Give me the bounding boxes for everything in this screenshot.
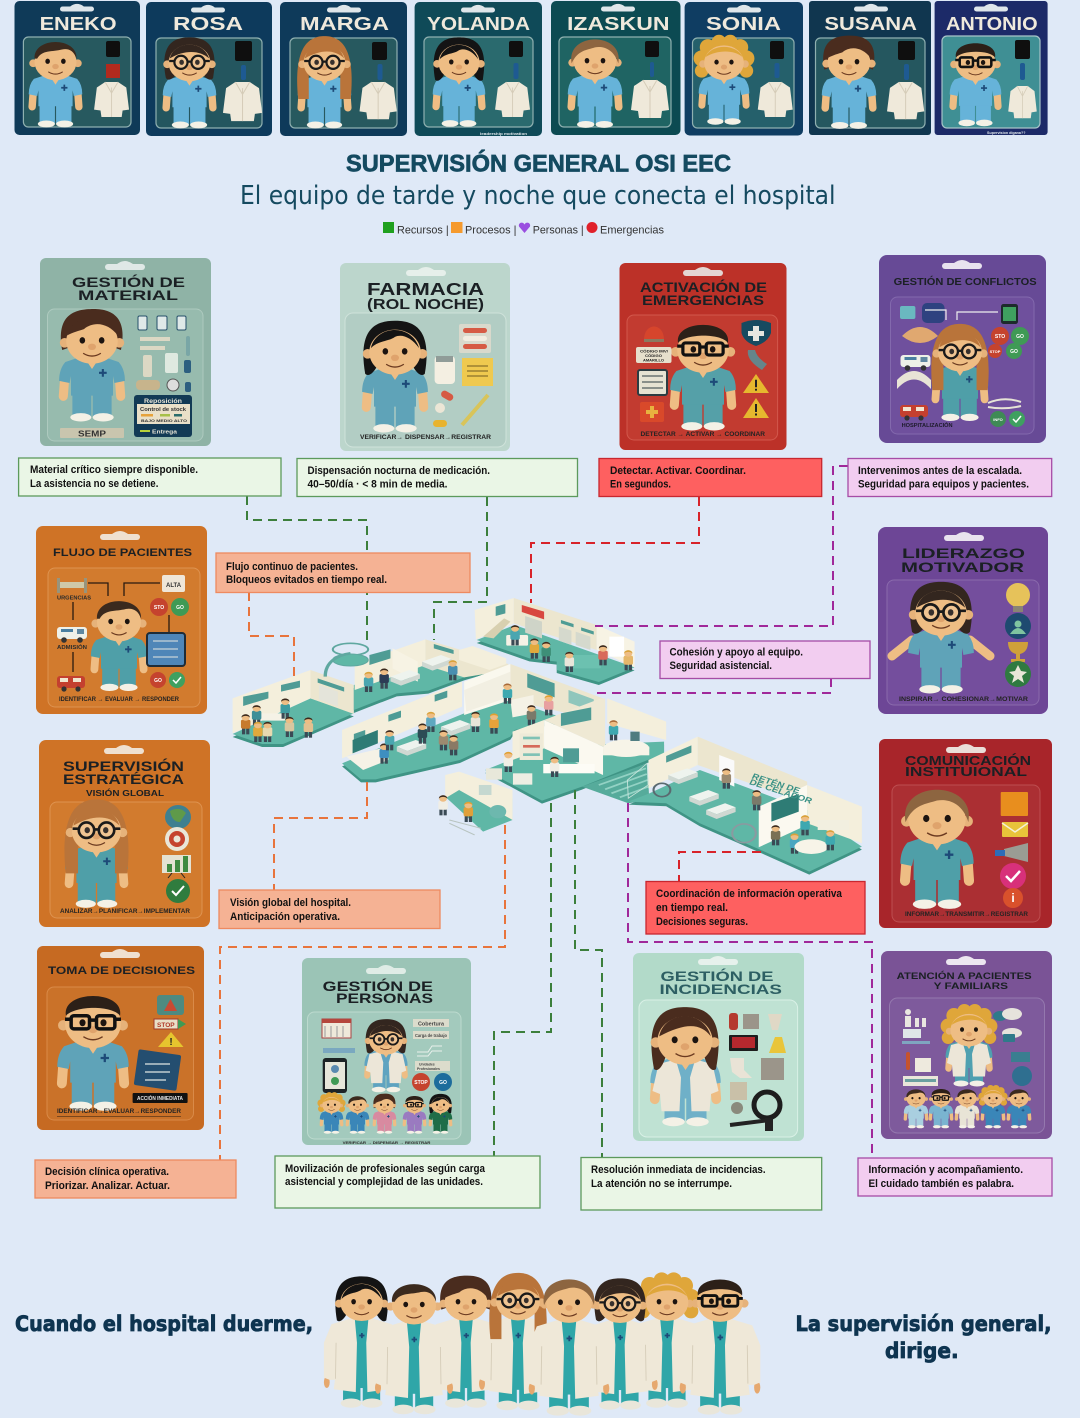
connectors: green (Recursos) xyxy=(247,496,602,1157)
heading xyxy=(72,273,185,303)
legend xyxy=(383,222,664,236)
closing text left: Cuando el hospital duerme, xyxy=(15,1312,313,1336)
care icons xyxy=(902,1008,1032,1086)
room: porter station: RETÉN DE xyxy=(750,772,802,795)
heading: (ROL NOCHE) xyxy=(367,296,484,313)
heading xyxy=(323,977,433,1006)
emergency icons: AMARILLO xyxy=(643,358,664,362)
decision icons: ! xyxy=(169,1037,173,1048)
reposición box xyxy=(134,395,192,437)
flow icons and arrows xyxy=(57,575,189,692)
heading: TOMA DE DECISIONES xyxy=(48,965,195,977)
card: Antonio xyxy=(935,1,1048,135)
heading: PERSONAS xyxy=(336,990,433,1006)
connectors: red (Emergencias) xyxy=(531,497,761,882)
stairs xyxy=(582,763,649,803)
decision icons xyxy=(134,995,186,1091)
card: Eneko: ENEKO xyxy=(40,14,117,34)
doll xyxy=(941,1004,997,1086)
staff icons: STOP xyxy=(414,1080,428,1086)
panel: gestión de conflictos xyxy=(879,255,1046,443)
staff icons: Profesionales xyxy=(417,1067,440,1071)
callout: material: Material crítico siempre disponible. xyxy=(30,464,198,476)
panel: flujo de pacientes xyxy=(36,526,207,714)
card: Susana: SUSANA xyxy=(824,14,917,34)
closing text right: dirige. xyxy=(885,1339,959,1363)
callout: cohesión xyxy=(660,641,870,678)
callout: información: Información y acompañamiento. xyxy=(868,1164,1023,1176)
incident icons xyxy=(729,1013,786,1131)
panel: farmacia xyxy=(340,263,510,451)
callout: información: El cuidado también es palabra. xyxy=(868,1178,1014,1190)
room: porter station xyxy=(628,737,862,875)
footer steps: VERIFICAR → DISPENSAR → REGISTRAR xyxy=(343,1140,431,1145)
callout: resolución: La atención no se interrumpe. xyxy=(591,1178,732,1190)
doll xyxy=(670,325,736,430)
callout: material xyxy=(19,458,281,496)
doll xyxy=(59,309,125,422)
card: Izaskun xyxy=(551,1,680,135)
callout: flujo xyxy=(216,553,470,592)
doll xyxy=(931,324,989,421)
callout: coordinación: Decisiones seguras. xyxy=(656,916,748,928)
legend: Emergencias xyxy=(600,224,664,236)
heading xyxy=(640,278,767,308)
supplies icons xyxy=(136,316,191,392)
heading xyxy=(63,757,184,798)
flow icons and arrows: STO xyxy=(154,605,164,611)
heading: ESTRATÉGICA xyxy=(63,771,184,787)
room: emergency entrance xyxy=(475,598,635,685)
room: ward with spiral stairs xyxy=(325,639,508,713)
heading: Y FAMILIARS xyxy=(934,981,1008,992)
callout: coordinación xyxy=(646,882,865,934)
footer steps: ANALIZAR→PLANIFICAR→IMPLEMENTAR xyxy=(60,909,191,915)
staff icons: Carga de trabajo xyxy=(415,1033,447,1038)
subtitle: El equipo de tarde y noche que conecta el hospital xyxy=(240,181,836,211)
room: lab and reception desk xyxy=(485,698,666,804)
callout: coordinación: Coordinación de información operativa xyxy=(656,888,843,900)
heading: ATENCIÓN A PACIENTES xyxy=(897,970,1032,982)
footer steps: INSPIRAR→ COHESIONAR→MOTIVAR xyxy=(899,697,1029,703)
flow icons and arrows: ADMISIÓN xyxy=(57,643,87,651)
heading: GESTIÓN DE CONFLICTOS xyxy=(894,275,1037,288)
callout: farmacia: Dispensación nocturna de medicación. xyxy=(308,465,490,477)
heading: FLUJO DE PACIENTES xyxy=(53,547,192,559)
team group illustration xyxy=(324,1272,760,1416)
top row: team cards xyxy=(14,1,1048,136)
label: HOSPITALIZACIÓN xyxy=(902,421,953,429)
conflict icons: INFO xyxy=(993,417,1003,422)
flow icons and arrows: GO xyxy=(154,678,162,684)
room: central nursing unit xyxy=(342,664,603,782)
conflict icons: GO xyxy=(1010,349,1018,355)
heading: ACTIVACIÓN DE xyxy=(640,278,767,295)
callout: visión: Anticipación operativa. xyxy=(230,911,340,923)
callout: resolución: Resolución inmediata de incidencias. xyxy=(591,1164,766,1176)
card: Rosa: ROSA xyxy=(173,14,243,34)
card: Marga: MARGA xyxy=(300,14,389,34)
conflict icons: GO xyxy=(1016,334,1024,340)
decision icons: STOP xyxy=(157,1022,175,1029)
card: Yolanda xyxy=(415,2,542,136)
callout: detectar: En segundos. xyxy=(610,478,671,490)
label SEMP xyxy=(60,428,124,438)
card: Sonia: SONIA xyxy=(706,14,781,34)
callout: detectar xyxy=(599,458,822,496)
callout: cohesión: Cohesión y apoyo al equipo. xyxy=(670,647,803,659)
callout: detectar: Detectar. Activar. Coordinar. xyxy=(610,465,746,477)
emergency icons: CÓDIGO xyxy=(645,353,662,358)
doll xyxy=(892,582,990,694)
heading: SUPERVISIÓN xyxy=(63,757,184,774)
pharmacy icons xyxy=(433,324,493,427)
title: SUPERVISIÓN GENERAL OSI EEC xyxy=(346,150,731,178)
card: Antonio: ANTONIO xyxy=(946,14,1038,34)
flow icons and arrows: ALTA xyxy=(166,583,182,589)
footer steps: IDENTIFICAR → EVALUAR → RESPONDER xyxy=(59,697,180,703)
closing text right xyxy=(796,1312,1052,1363)
panel: activación de emergencias xyxy=(620,263,786,450)
emergency icons: CÓDIGO IMV/ xyxy=(640,348,668,354)
doll xyxy=(650,1007,721,1126)
panel: atención a pacientes xyxy=(881,951,1052,1139)
footer steps: INFORMAR→TRANSMITIR→REGISTRAR xyxy=(905,912,1029,918)
heading: LIDERAZGO xyxy=(902,545,1025,561)
panel: liderazgo motivador xyxy=(878,527,1048,714)
footer steps: DETECTAR → ACTIVAR → COORDINAR xyxy=(640,432,766,438)
card: Yolanda: leadership motivation xyxy=(480,131,528,136)
panel: comunicación institucional xyxy=(879,739,1052,928)
footer steps: VERIFICAR→ DISPENSAR→REGISTRAR xyxy=(360,435,492,441)
panel: gestión de material xyxy=(40,258,211,446)
card: Marga xyxy=(280,2,407,136)
reposición box: BAJO MEDIO ALTO xyxy=(141,419,187,423)
callout: flujo: Bloqueos evitados en tiempo real. xyxy=(226,574,387,586)
callout: farmacia: 40–50/día · < 8 min de media. xyxy=(308,478,448,490)
card: Sonia xyxy=(685,2,803,136)
communication icons xyxy=(995,792,1028,908)
isometric hospital map xyxy=(233,598,862,875)
panel: toma de decisiones xyxy=(37,946,204,1130)
callout: flujo: Flujo continuo de pacientes. xyxy=(226,561,358,573)
conflict icons: STOP xyxy=(990,349,1001,354)
callout: escalada: Seguridad para equipos y pacientes. xyxy=(858,478,1029,490)
label SEMP: SEMP xyxy=(78,430,107,438)
panel: gestión de personas xyxy=(302,958,471,1145)
heading xyxy=(905,753,1031,779)
callout: escalada xyxy=(848,458,1052,496)
legend: Procesos | xyxy=(465,224,516,236)
heading: INSTITUIONAL xyxy=(905,764,1027,779)
reposición box: Control de stock xyxy=(140,407,186,413)
heading: FARMACIA xyxy=(367,279,484,299)
card: Rosa xyxy=(146,2,272,136)
reposición box: Reposición xyxy=(144,399,182,405)
footer steps: IDENTIFICAR→EVALUAR→RESPONDER xyxy=(57,1109,182,1115)
panel: gestión de incidencias xyxy=(633,953,804,1141)
doll xyxy=(364,1019,408,1092)
heading: MOTIVADOR xyxy=(901,559,1024,575)
emergency icons xyxy=(636,320,771,422)
label: acción inmediata: ACCIÓN INMEDIATA xyxy=(137,1094,183,1102)
callout: resolución xyxy=(581,1158,822,1210)
card: Susana xyxy=(809,1,931,135)
heading: EMERGENCIAS xyxy=(642,292,764,308)
doll xyxy=(91,601,147,691)
communication icons: i xyxy=(1011,891,1015,905)
heading xyxy=(660,967,782,997)
room: porter station: DE CELADOR xyxy=(748,777,814,806)
callout: farmacia xyxy=(297,458,578,496)
heading: GESTIÓN DE xyxy=(72,273,185,290)
heading: INCIDENCIAS xyxy=(660,981,782,997)
callout: movilización xyxy=(275,1156,540,1208)
card: Eneko xyxy=(14,1,140,135)
callout: movilización: asistencial y complejidad de las unidades. xyxy=(285,1176,483,1188)
heading: MATERIAL xyxy=(78,287,179,303)
staff icons xyxy=(322,1019,452,1093)
conflict icons xyxy=(897,303,1029,427)
card: Antonio: Supervision digana?? xyxy=(987,130,1026,135)
flow icons and arrows: URGENCIAS xyxy=(57,596,92,602)
room: therapy xyxy=(438,772,513,835)
callout: movilización: Movilización de profesionales según carga xyxy=(285,1163,486,1175)
staff icons: Unidades xyxy=(419,1062,435,1066)
small people dolls xyxy=(904,1085,1031,1128)
heading xyxy=(367,279,484,313)
panel: supervisión estratégica xyxy=(39,740,210,927)
leadership icons xyxy=(1005,583,1031,687)
callout: visión: Visión global del hospital. xyxy=(230,897,351,909)
callout: decisión xyxy=(35,1160,236,1198)
heading xyxy=(897,970,1032,992)
callout: cohesión: Seguridad asistencial. xyxy=(670,660,772,672)
heading: VISIÓN GLOBAL xyxy=(86,789,164,798)
callout: coordinación: en tiempo real. xyxy=(656,902,728,914)
strategy icons xyxy=(162,805,191,903)
callout: visión xyxy=(219,890,440,928)
flow icons and arrows: GO xyxy=(176,605,184,611)
callout: información xyxy=(858,1158,1052,1196)
room: reception lobby xyxy=(233,670,354,747)
heading: COMUNICACIÓN xyxy=(905,753,1031,768)
card: Izaskun: IZASKUN xyxy=(567,14,670,34)
doll xyxy=(64,799,129,908)
callout: decisión: Decisión clínica operativa. xyxy=(45,1166,169,1178)
staff icons: GO xyxy=(439,1080,447,1086)
doll xyxy=(900,790,974,909)
doll xyxy=(57,996,129,1111)
legend: Personas | xyxy=(533,224,584,236)
card: Yolanda: YOLANDA xyxy=(427,14,530,34)
reposición box: Entrega xyxy=(152,430,178,436)
conflict icons: STO xyxy=(995,334,1005,340)
closing text right: La supervisión general, xyxy=(796,1312,1052,1336)
connectors: purple (Personas) xyxy=(594,466,872,1158)
heading: GESTIÓN DE xyxy=(660,967,774,984)
callout: material: La asistencia no se detiene. xyxy=(30,478,158,490)
heading: GESTIÓN DE xyxy=(323,977,433,994)
callout: escalada: Intervenimos antes de la escalada. xyxy=(858,465,1022,477)
small team dolls xyxy=(317,1092,452,1134)
legend: Recursos | xyxy=(397,224,449,236)
connectors: orange (Procesos) xyxy=(220,592,505,1160)
label: acción inmediata xyxy=(133,1093,188,1103)
heading xyxy=(901,545,1025,575)
staff icons: Cobertura xyxy=(418,1022,444,1028)
doll xyxy=(362,321,428,432)
callout: decisión: Priorizar. Analizar. Actuar. xyxy=(45,1180,170,1192)
